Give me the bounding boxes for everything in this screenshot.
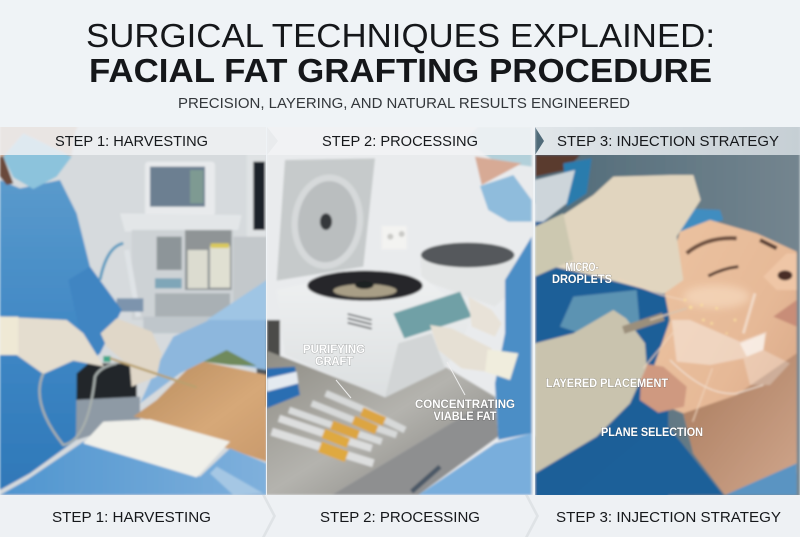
top label band: step 3: STEP 3: INJECTION STRATEGY bbox=[557, 133, 779, 150]
top label band: step 3 bbox=[535, 127, 800, 155]
callout: micro-droplets bbox=[552, 262, 612, 286]
mesh overlay bbox=[670, 285, 790, 394]
callout: concentrating viable fat bbox=[415, 362, 515, 423]
panel: step 2 processing photo bbox=[265, 120, 535, 497]
callout: micro-droplets: MICRO- bbox=[566, 262, 599, 274]
top label band: step 1: STEP 1: HARVESTING bbox=[55, 133, 208, 150]
bottom label: step 2: STEP 2: PROCESSING bbox=[320, 509, 480, 526]
callout: purifying graft: PURIFYING bbox=[303, 344, 365, 356]
callout: purifying graft bbox=[303, 344, 365, 398]
top label band: step 2 bbox=[267, 127, 533, 155]
callout: concentrating viable fat: CONCENTRATING bbox=[415, 399, 515, 411]
bottom label: step 3: STEP 3: INJECTION STRATEGY bbox=[556, 509, 781, 526]
bottom bar with step chevrons bbox=[0, 495, 800, 537]
syringes bbox=[272, 393, 405, 463]
callout: layered placement: LAYERED PLACEMENT bbox=[546, 378, 668, 390]
title: SURGICAL TECHNIQUES EXPLAINED: bbox=[86, 17, 715, 54]
callout: micro-droplets: DROPLETS bbox=[552, 274, 612, 286]
callout: plane selection: PLANE SELECTION bbox=[601, 427, 703, 439]
subtitle heading: FACIAL FAT GRAFTING PROCEDURE bbox=[89, 53, 712, 90]
callout: purifying graft: GRAFT bbox=[315, 356, 353, 368]
panel: step 3 injection strategy photo bbox=[530, 120, 800, 497]
top label band: step 1 bbox=[0, 127, 266, 155]
panel: step 1 harvesting photo bbox=[0, 120, 270, 497]
callout: concentrating viable fat: VIABLE FAT bbox=[434, 411, 496, 423]
top label band: step 2: STEP 2: PROCESSING bbox=[322, 133, 478, 150]
bottom label: step 1: STEP 1: HARVESTING bbox=[52, 509, 211, 526]
tagline: PRECISION, LAYERING, AND NATURAL RESULTS ENGINEERED bbox=[178, 95, 630, 112]
